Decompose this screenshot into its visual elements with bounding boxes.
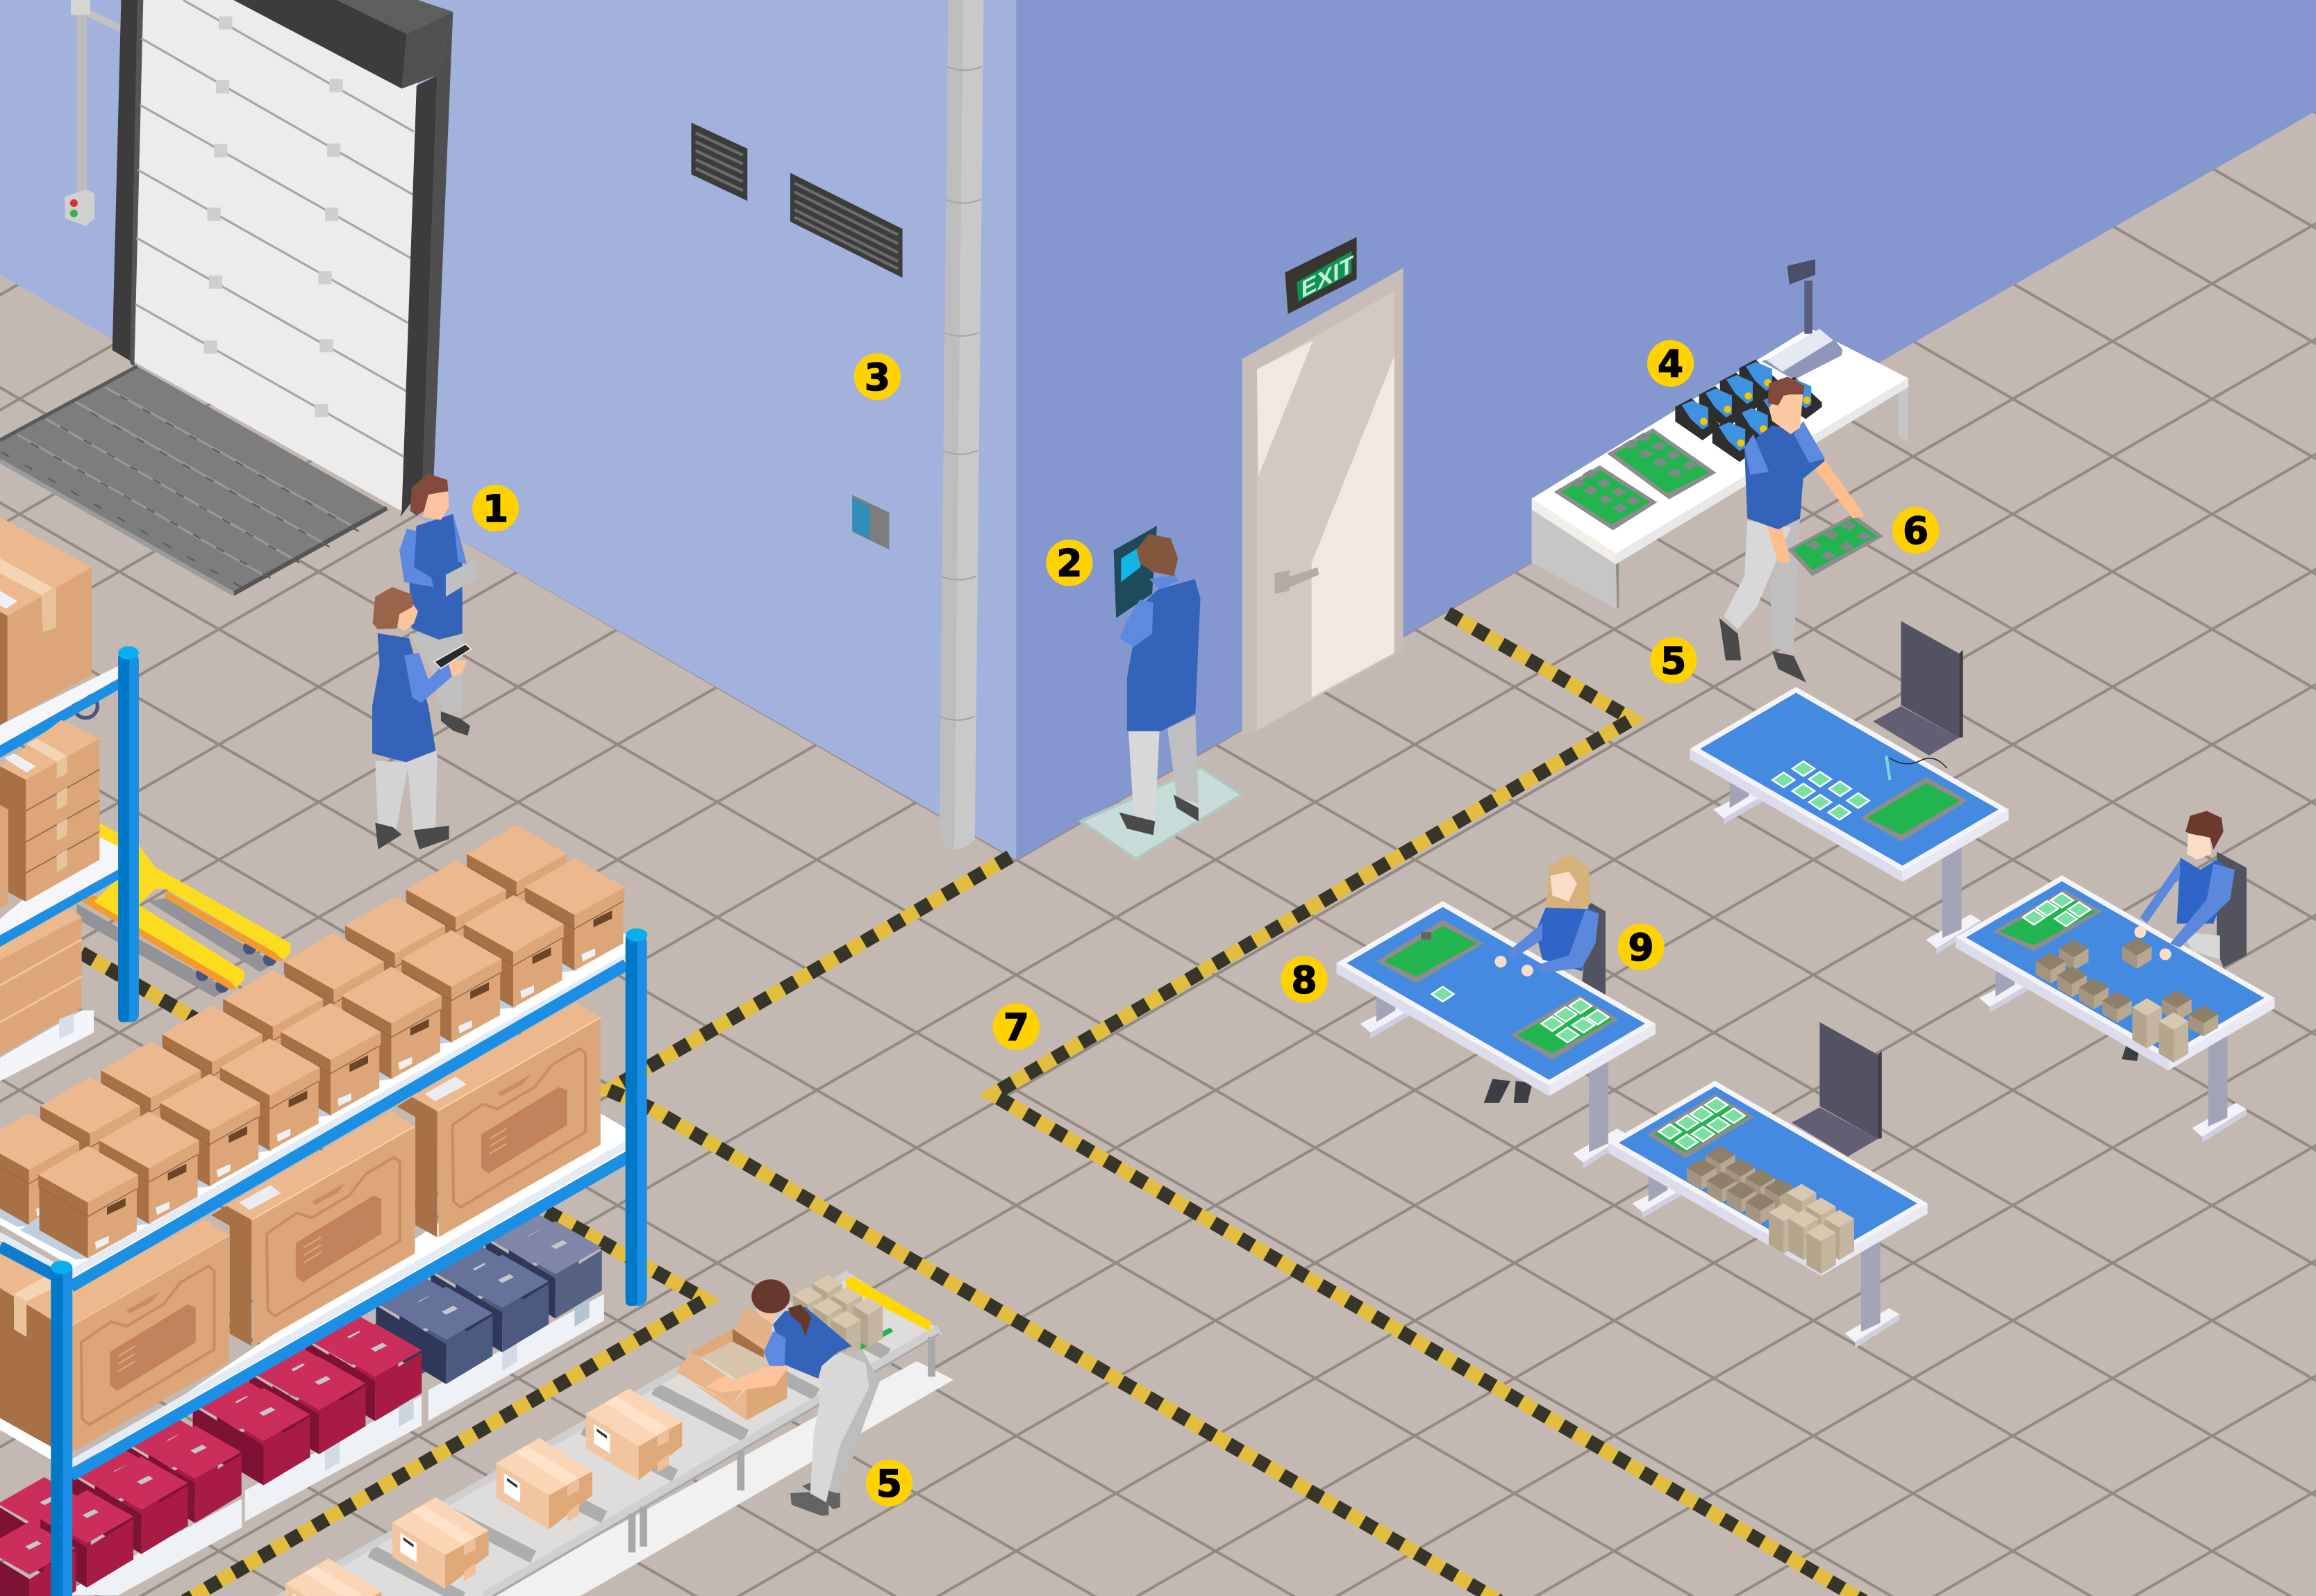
- tray with cartons on conveyor: [793, 1275, 931, 1361]
- desk C: [1608, 1081, 1928, 1348]
- worker: brown-haired seated woman chair: [2217, 851, 2247, 967]
- back table: [1532, 328, 1908, 608]
- worker: man carrying tray: [1719, 376, 1883, 683]
- desk D: [1956, 875, 2274, 1142]
- badge 6: [1892, 507, 1939, 554]
- badge 2: 2: [1056, 542, 1082, 585]
- electronic scale: [1762, 259, 1842, 380]
- desk C parts: [1647, 1095, 1854, 1274]
- desk D parts: [1993, 890, 2218, 1063]
- desk A: [1690, 687, 2009, 954]
- navy crates: [376, 1211, 602, 1384]
- badge 5: 5: [1660, 640, 1686, 683]
- exit sign: [1285, 237, 1357, 314]
- ventilation pipe: [940, 0, 984, 849]
- worker: seated woman shoes: [2122, 1043, 2140, 1061]
- left second shelf beam: [0, 864, 128, 947]
- small cartons front row: [20, 858, 625, 1260]
- worker: packing at conveyor: [706, 1279, 880, 1516]
- safety tape: lower aisle: [81, 953, 706, 1596]
- badge 5 lower: [866, 1460, 913, 1506]
- wall: right wall: [1016, 0, 2316, 860]
- pallet: lower red crates: [59, 1499, 242, 1595]
- badge 9: 9: [1628, 926, 1653, 969]
- badge 5: [1650, 637, 1697, 683]
- worker: woman with phone: [372, 587, 471, 849]
- badge 3: 3: [865, 356, 890, 399]
- tray 1: [1554, 465, 1657, 531]
- upper beam: [0, 965, 626, 1287]
- vent large: [790, 173, 903, 278]
- worker: seated woman lap: [2180, 931, 2220, 959]
- badge 2: [1046, 540, 1092, 586]
- worker: blonde seated woman feet: [1484, 1079, 1533, 1103]
- pallet truck shadow: [77, 898, 275, 997]
- main shelf: upper deck: [0, 911, 638, 1279]
- red crates: [0, 1312, 422, 1596]
- main shelf: lower deck: [0, 1113, 637, 1471]
- chair: desk C: [1792, 1022, 1882, 1156]
- large cartons: [0, 1002, 601, 1455]
- badge 7: [993, 1004, 1040, 1050]
- badge 1: 1: [483, 488, 508, 531]
- exit door: [1242, 268, 1403, 735]
- vent small: [691, 123, 747, 201]
- worker: woman with tablet: [399, 474, 477, 735]
- conveyor floor strip: [488, 1361, 953, 1596]
- dock door: [113, 0, 453, 517]
- desk A parts: [1772, 756, 1967, 842]
- small cartons back row: [0, 825, 567, 1227]
- badge 5 lower: 5: [876, 1463, 902, 1506]
- dock leveller plate: [0, 366, 387, 594]
- desk B: [1336, 901, 1656, 1168]
- pallet: red crates: [245, 1395, 422, 1522]
- badge 4: [1647, 340, 1694, 387]
- shelf post right: [626, 929, 647, 1306]
- open carton being packed: [676, 1308, 787, 1420]
- conveyor cartons: [285, 1388, 682, 1596]
- left top shelf deck: [0, 660, 131, 745]
- worker: brown-haired seated woman: [2134, 811, 2235, 960]
- pallet truck: [81, 823, 290, 989]
- badge 1: [472, 485, 519, 531]
- wall sensor device: [852, 495, 889, 549]
- worker: scanning at access panel: [1081, 526, 1242, 859]
- lower cartons on pallet: [0, 908, 94, 1081]
- tray 2: [1607, 429, 1716, 499]
- component bins: [1675, 360, 1822, 462]
- desk B parts: [1376, 920, 1619, 1060]
- safety tape: left aisle: [608, 857, 1499, 1596]
- badge 6: 6: [1903, 510, 1928, 553]
- left post: [118, 647, 139, 1022]
- badge 4: 4: [1658, 342, 1683, 385]
- exit sign: EXIT: [1301, 249, 1353, 304]
- badge 3: [854, 354, 901, 400]
- badge 8: 8: [1292, 958, 1317, 1001]
- shelf post front: [51, 1261, 72, 1596]
- switch box with conduit: [65, 0, 121, 226]
- pallet: navy crates: [428, 1294, 604, 1421]
- wall: left warehouse wall: [0, 0, 1016, 860]
- worker: blonde seated woman: [1494, 854, 1599, 976]
- worker: blonde seated woman chair: [1582, 901, 1606, 995]
- left top shelf beam: [0, 672, 131, 758]
- left shelving unit: [0, 517, 139, 1081]
- left second shelf deck: [0, 837, 128, 935]
- pallet truck wheels: [196, 941, 276, 992]
- badge 9: [1617, 924, 1665, 970]
- conveyor: [279, 1273, 940, 1596]
- conveyor bed: [279, 1273, 940, 1596]
- chair: desk A: [1873, 621, 1963, 756]
- badge 8: [1281, 956, 1328, 1003]
- big carton on left top shelf: [0, 517, 92, 725]
- badge 7: 7: [1003, 1006, 1029, 1049]
- lower shelf beam: [71, 1152, 637, 1476]
- stacked cartons: [0, 720, 99, 908]
- safety tape: central aisle: [992, 613, 1864, 1596]
